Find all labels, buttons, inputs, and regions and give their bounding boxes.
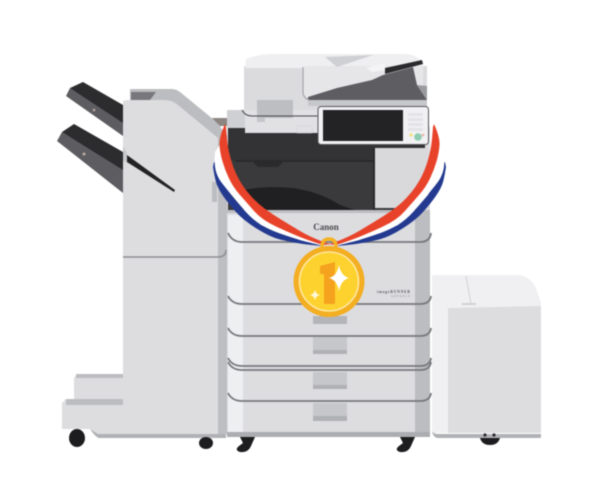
medal rim xyxy=(294,246,364,317)
ribbon xyxy=(213,124,446,246)
right shaded side xyxy=(415,210,430,434)
deck lid crease xyxy=(466,276,471,304)
medal loop xyxy=(322,239,336,247)
right ribbon strap xyxy=(328,124,446,246)
output bay dark interior xyxy=(227,127,428,213)
finisher body xyxy=(123,100,218,434)
feeder right cover xyxy=(304,66,423,100)
deck front panel xyxy=(448,306,541,433)
scanner base xyxy=(227,110,245,128)
base seam xyxy=(242,110,318,116)
document tray xyxy=(308,67,427,100)
medal face xyxy=(300,252,358,311)
right white band xyxy=(336,140,444,245)
paper slot xyxy=(127,155,175,192)
small sparkle xyxy=(310,290,320,300)
finisher seam xyxy=(123,250,226,257)
lower output tray xyxy=(57,124,123,193)
left highlight strip xyxy=(228,215,243,432)
casters xyxy=(237,437,415,452)
deck base xyxy=(432,431,541,438)
keypad xyxy=(408,113,423,131)
deck shell xyxy=(432,275,541,433)
left white band xyxy=(215,140,323,245)
model label xyxy=(377,290,410,298)
model label: ADVANCE xyxy=(391,295,410,298)
main copier body xyxy=(227,125,431,452)
side paper deck xyxy=(432,275,541,445)
brand label: Canon xyxy=(313,222,339,232)
right blue band xyxy=(336,162,446,246)
gold medal xyxy=(294,239,364,317)
left blue band xyxy=(213,162,323,246)
drawer handles xyxy=(313,316,347,421)
body shell xyxy=(227,125,430,437)
left red band xyxy=(219,124,331,245)
lower step shelves xyxy=(62,374,226,438)
start button xyxy=(414,133,422,141)
finisher casters xyxy=(69,429,213,449)
grey scanner block xyxy=(257,100,293,118)
deck caster xyxy=(480,433,500,445)
right red band xyxy=(328,124,440,245)
finisher unit with output trays xyxy=(57,82,227,449)
control panel xyxy=(318,106,428,144)
drawer seams xyxy=(228,233,431,401)
feeder lid xyxy=(245,54,423,68)
feeder body xyxy=(244,66,427,110)
large sparkle xyxy=(329,265,349,291)
numeral one xyxy=(320,262,335,304)
left ribbon strap xyxy=(213,124,331,246)
model label: imageRUNNER xyxy=(377,290,410,294)
finisher top band xyxy=(130,89,225,160)
touch screen xyxy=(323,110,403,141)
upper output tray xyxy=(66,82,123,136)
scanner and document feeder xyxy=(227,54,427,133)
